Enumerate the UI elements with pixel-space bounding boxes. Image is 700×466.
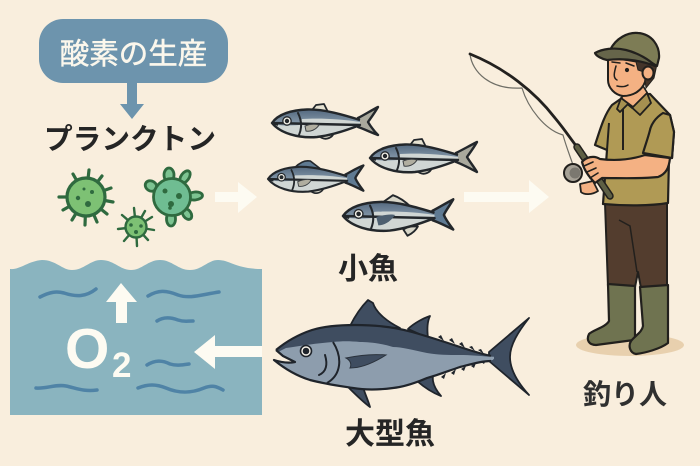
arrow: oxygen up (106, 283, 137, 323)
label: small fish: 小魚 (338, 253, 398, 286)
collar (617, 93, 651, 115)
cap (610, 33, 659, 66)
small fish 3 (268, 161, 363, 193)
icon: large tuna (274, 300, 529, 407)
sleeve seam (643, 113, 674, 158)
arrow: big fish to water (194, 335, 262, 369)
O2 label (65, 317, 131, 385)
fishing line (470, 54, 573, 165)
boots (588, 284, 668, 354)
callout: oxygen production: 酸素の生産 (60, 38, 207, 71)
callout: oxygen production (39, 19, 228, 83)
icon: angler (470, 33, 684, 356)
heading: plankton: プランクトン (44, 123, 216, 156)
ear (642, 66, 654, 80)
O2 label: 2 (112, 346, 131, 385)
face details (625, 68, 629, 72)
small fish 2 (370, 139, 477, 174)
label: large fish: 大型魚 (345, 418, 435, 451)
icon: small fish school (268, 104, 477, 236)
arrow: callout to plankton (120, 82, 144, 119)
icon: plankton group (59, 168, 203, 246)
ground shadow (576, 334, 684, 356)
trousers (605, 203, 667, 288)
O2 label: O (65, 317, 109, 381)
icon: small plankton (118, 208, 154, 246)
fishing rod (470, 54, 577, 147)
neck (622, 86, 648, 108)
icon: spiky plankton (59, 170, 113, 225)
waves (36, 289, 223, 392)
hair (613, 58, 657, 88)
shirt (595, 94, 674, 205)
small fish 4 (343, 195, 453, 236)
forearm and hand (582, 155, 670, 183)
arrow: small fish to angler (464, 180, 549, 213)
head (608, 58, 648, 96)
icon: budding plankton (143, 168, 203, 226)
finlets (438, 335, 486, 379)
label: angler: 釣り人 (583, 379, 667, 410)
panel: sea water (10, 260, 262, 415)
arrow: plankton to small fish (215, 182, 257, 213)
reel (564, 164, 582, 182)
lower hand (580, 181, 598, 194)
small fish 1 (272, 104, 378, 139)
